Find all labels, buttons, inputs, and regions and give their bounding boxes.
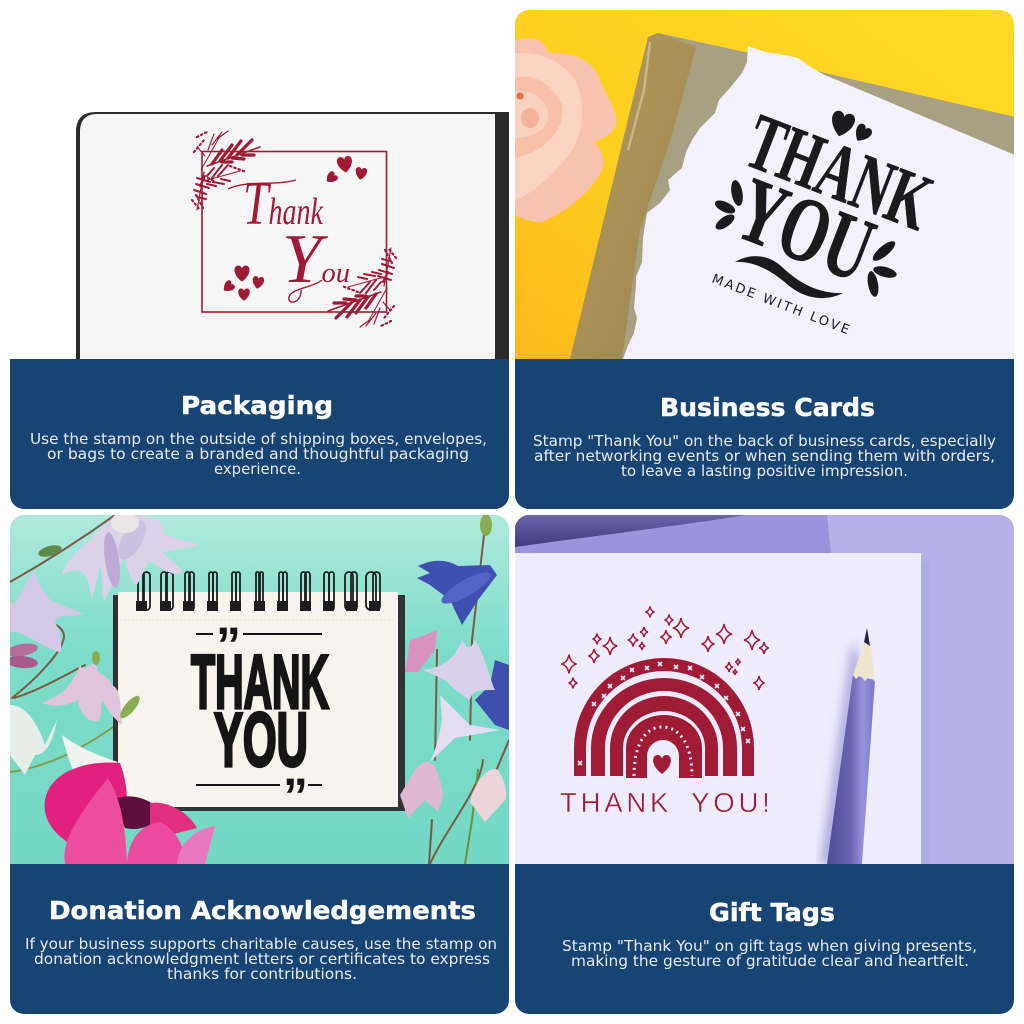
quote rule top xyxy=(196,628,322,642)
sprig: bottom right corner xyxy=(328,248,396,327)
panel: packaging xyxy=(10,112,509,509)
icon: pencil xyxy=(827,628,875,864)
description xyxy=(25,935,497,983)
icon: drops right xyxy=(868,241,897,297)
quote rule top: ” xyxy=(216,617,241,673)
icon: hearts xyxy=(832,110,872,141)
description xyxy=(30,430,487,478)
hearts: bottom left xyxy=(220,266,265,301)
stamp text: made with love: MADE WITH LOVE xyxy=(710,272,851,338)
heading: Packaging xyxy=(181,391,333,420)
swoosh xyxy=(735,256,843,298)
photo: paper shadow xyxy=(921,560,929,865)
rainbow arcs xyxy=(574,658,754,778)
photo: purple slab xyxy=(515,515,831,553)
stamp text: THANK: THANK xyxy=(191,640,329,725)
heading: Gift Tags xyxy=(709,898,835,927)
stamp text: Thank: Thank xyxy=(243,170,324,238)
photo: stone slab xyxy=(570,33,1015,359)
caption box xyxy=(10,864,509,1014)
panel: gift tags xyxy=(515,515,1014,1014)
rainbow beads xyxy=(634,727,692,776)
description: after networking events or when sending them with orders, xyxy=(534,447,995,465)
description xyxy=(562,937,977,970)
sparkles xyxy=(561,606,769,690)
photo: rose xyxy=(515,38,616,222)
description: thanks for contributions. xyxy=(167,965,357,983)
caption box xyxy=(515,359,1014,509)
caption box xyxy=(515,864,1014,1014)
icon: heart in rainbow xyxy=(653,755,671,774)
description: Stamp "Thank You" on gift tags when giving presents, xyxy=(562,937,977,955)
photo: notebook xyxy=(113,572,405,824)
heading: Donation Acknowledgements xyxy=(49,896,476,925)
quote rule bottom: ” xyxy=(283,768,308,824)
description xyxy=(533,432,996,480)
stamp text: thank you: THANK YOU! xyxy=(560,787,774,818)
description: If your business supports charitable causes, use the stamp on xyxy=(25,935,497,953)
description: experience. xyxy=(214,460,301,478)
photo: pink peony xyxy=(45,763,215,864)
heading: Business Cards xyxy=(660,393,875,422)
panel: business cards xyxy=(515,10,1015,509)
stamp: rainbow xyxy=(560,606,774,818)
photo: black notebook with white page xyxy=(76,112,509,359)
description: making the gesture of gratitude clear and heartfelt. xyxy=(571,952,969,970)
photo: white paper xyxy=(515,553,921,864)
description: Stamp "Thank You" on the back of business cards, especially xyxy=(533,432,996,450)
quote rule bottom xyxy=(196,778,322,793)
description: donation acknowledgment letters or certificates to express xyxy=(34,950,490,968)
icon: drops left xyxy=(714,180,743,230)
photo: leaves and buds xyxy=(37,514,492,721)
stamp text: YOU: YOU xyxy=(724,157,887,301)
photo: pencil shadow xyxy=(820,640,860,864)
caption box xyxy=(10,359,509,509)
flourishes around script xyxy=(228,180,322,302)
photo: flower stems xyxy=(10,515,509,864)
description: or bags to create a branded and thoughtful packaging xyxy=(47,445,469,463)
photo: torn paper xyxy=(623,46,1015,359)
description: Use the stamp on the outside of shipping boxes, envelopes, xyxy=(30,430,487,448)
stamp: thank you frame xyxy=(192,131,396,327)
stamp: thank you made with love xyxy=(712,110,934,334)
sprig: top left corner xyxy=(192,131,260,210)
stamp text: YOU: YOU xyxy=(214,698,308,783)
spiral binding xyxy=(138,572,380,610)
description: to leave a lasting positive impression. xyxy=(621,462,908,480)
rainbow crosses xyxy=(578,662,750,765)
stamp text: You: You xyxy=(282,221,350,298)
hearts: top right xyxy=(326,156,368,182)
panel: donation acknowledgements xyxy=(5,513,509,1014)
photo: flowers right xyxy=(400,561,509,822)
binding holes xyxy=(136,601,380,611)
photo: flowers left xyxy=(5,513,492,785)
